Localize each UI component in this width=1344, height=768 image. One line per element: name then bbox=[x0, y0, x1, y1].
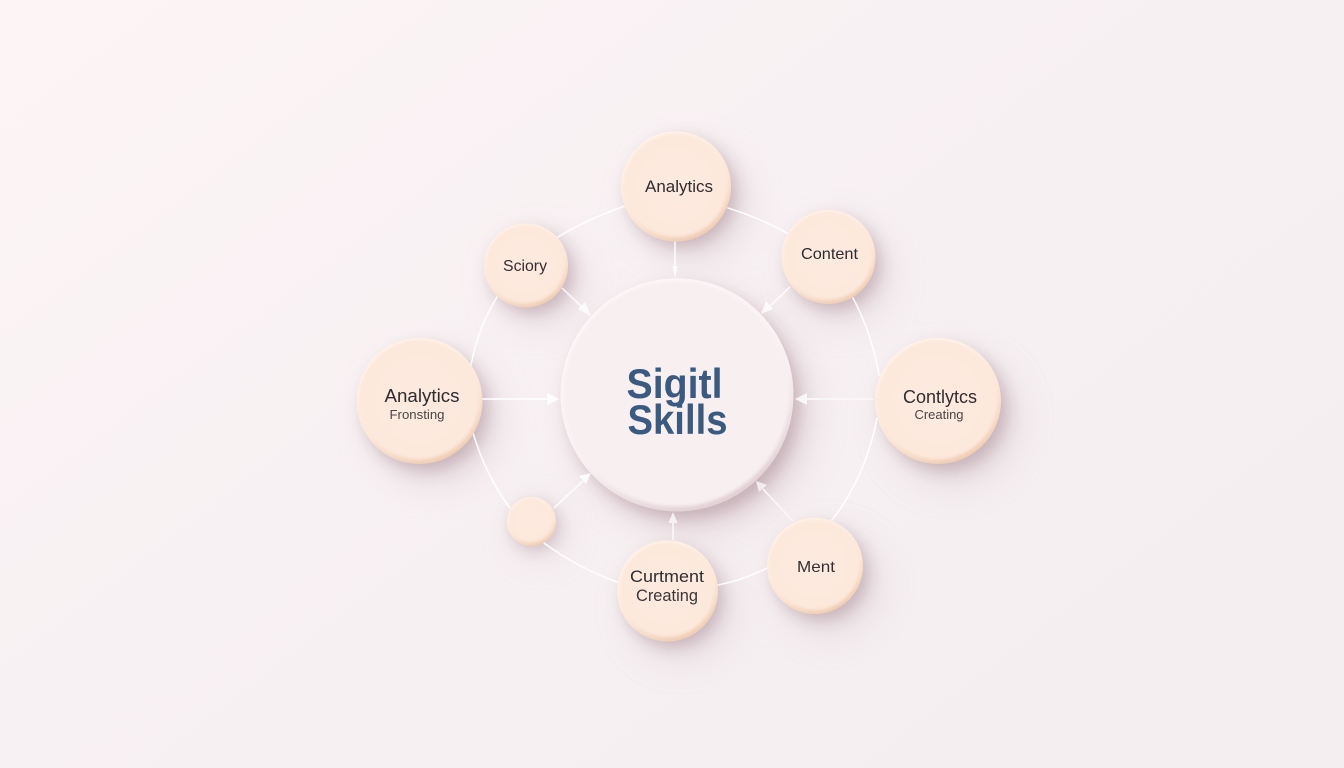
arrow: small node to centre bbox=[554, 473, 591, 508]
node: Sciory bbox=[484, 224, 568, 308]
central hub: Sigitl Skills bbox=[560, 278, 794, 512]
arrow: Sciory to centre bbox=[562, 288, 591, 316]
arrow: Content to centre bbox=[761, 287, 790, 314]
hub title: Skills bbox=[628, 396, 728, 443]
node: top Analytics bbox=[621, 132, 731, 242]
node: left Analytics Fronsting: Analytics bbox=[384, 385, 460, 406]
node: Contlytcs Creating bbox=[875, 338, 1001, 464]
node: left Analytics Fronsting bbox=[356, 338, 482, 464]
node: Contlytcs Creating: Creating bbox=[914, 407, 964, 422]
drop shadows of hub and nodes bbox=[364, 139, 1017, 658]
node: Sciory: Sciory bbox=[503, 258, 547, 275]
arrow: left Analytics to centre bbox=[482, 393, 559, 405]
ring connectors between outer nodes bbox=[471, 206, 879, 585]
node: Curtment Creating: Creating bbox=[636, 587, 698, 605]
node: Contlytcs Creating: Contlytcs bbox=[903, 387, 977, 407]
node: small unlabelled circle bbox=[507, 497, 556, 546]
arrow: Curtment to centre bbox=[668, 512, 678, 540]
node: Curtment Creating bbox=[617, 540, 718, 642]
node: Ment bbox=[767, 518, 863, 614]
arrow: top Analytics to centre bbox=[672, 241, 678, 278]
hub title bbox=[626, 360, 728, 443]
node: Content bbox=[782, 210, 876, 304]
node: Content: Content bbox=[801, 246, 859, 263]
arrow: Ment to centre bbox=[756, 481, 793, 521]
node: left Analytics Fronsting: Fronsting bbox=[390, 407, 444, 422]
hub title: Sigitl bbox=[626, 360, 722, 407]
node: top Analytics: Analytics bbox=[645, 177, 713, 196]
arrow: Contlytcs to centre bbox=[795, 393, 873, 405]
node: Ment: Ment bbox=[797, 559, 836, 576]
node: Curtment Creating: Curtment bbox=[630, 567, 704, 586]
